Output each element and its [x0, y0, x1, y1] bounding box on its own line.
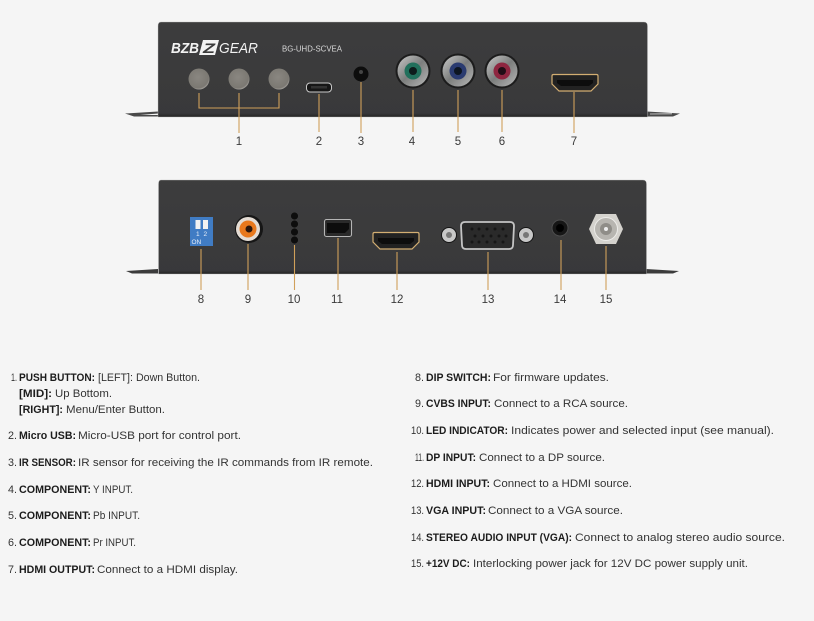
legend: right column: For firmware updates. — [493, 372, 609, 384]
legend: right column: 14. — [411, 532, 424, 544]
legend: right column — [411, 372, 785, 570]
LED indicators — [291, 212, 298, 244]
legend: left column: Connect to a HDMI display. — [97, 564, 238, 576]
legend: left column: Menu/Enter Button. — [66, 404, 165, 416]
DIP switch: ON — [192, 239, 202, 246]
legend: left column: 1. — [11, 372, 17, 384]
rear view numbers: 11 — [331, 294, 343, 306]
device body — [158, 180, 646, 274]
CVBS RCA jack — [235, 215, 263, 243]
legend: right column: 9. — [415, 398, 424, 410]
legend: left column: 5. — [8, 510, 17, 522]
HDMI input port — [373, 232, 419, 249]
rear view numbers: 9 — [245, 294, 251, 306]
legend: right column: +12V DC: — [426, 558, 470, 570]
brand logo: BZB — [171, 40, 199, 57]
legend: left column: [RIGHT]: — [19, 404, 63, 416]
mounting feet — [126, 269, 679, 274]
legend: right column: HDMI INPUT: — [426, 478, 490, 490]
DIP switch: 2 — [204, 231, 208, 238]
DIP switch — [190, 217, 213, 246]
front view numbers: 5 — [455, 136, 461, 148]
front view numbers: 6 — [499, 136, 505, 148]
legend: right column: 15. — [411, 558, 424, 570]
callout leader lines, front — [199, 82, 574, 133]
legend: right column: VGA INPUT: — [426, 505, 486, 517]
DisplayPort input — [324, 220, 352, 236]
front view numbers: 3 — [358, 136, 364, 148]
rear view numbers: 15 — [600, 294, 612, 306]
legend: right column: STEREO AUDIO INPUT (VGA): — [426, 532, 572, 544]
legend: right column: 12. — [411, 478, 424, 490]
legend: left column: Up Bottom. — [55, 388, 112, 400]
IR sensor — [354, 66, 368, 82]
legend: right column: 13. — [411, 505, 424, 517]
rear view numbers: 13 — [482, 294, 494, 306]
DC power jack — [589, 214, 623, 244]
legend: left column: 3. — [8, 457, 17, 469]
component jack: Pb — [440, 54, 476, 88]
legend: right column: LED INDICATOR: — [426, 425, 508, 437]
front view numbers: 2 — [316, 136, 322, 148]
front view numbers: 7 — [571, 136, 577, 148]
device body — [158, 22, 648, 117]
mounting feet — [125, 112, 680, 116]
legend: right column: 10. — [411, 425, 424, 437]
legend: right column: Connect to a HDMI source. — [493, 478, 632, 490]
legend: left column: 2. — [8, 430, 17, 442]
legend: left column: 6. — [8, 537, 17, 549]
legend: left column: 4. — [8, 484, 17, 496]
legend: left column: PUSH BUTTON: — [19, 372, 95, 384]
panel: front view of device — [125, 22, 680, 133]
legend: right column: 8. — [415, 372, 424, 384]
legend: left column: Micro USB: — [19, 430, 76, 442]
legend: left column: COMPONENT: — [19, 537, 91, 549]
legend: right column: Connect to analog stereo audio source. — [575, 532, 785, 544]
legend: left column: COMPONENT: — [19, 484, 91, 496]
legend: right column: 11. — [415, 452, 424, 464]
micro USB port — [306, 83, 332, 92]
legend: right column: Connect to a VGA source. — [488, 505, 623, 517]
legend: right column: Indicates power and selected input (see manual). — [511, 425, 774, 437]
front view numbers: 1 — [236, 136, 242, 148]
legend: left column — [8, 372, 373, 576]
DIP switch: 1 — [196, 231, 200, 238]
rear view numbers: 10 — [288, 294, 300, 306]
legend: right column: Interlocking power jack for 12V DC power supply unit. — [473, 558, 748, 570]
legend: left column: 7. — [8, 564, 17, 576]
front view numbers: 4 — [409, 136, 416, 148]
brand logo — [171, 40, 258, 57]
push buttons — [188, 68, 290, 90]
front view numbers — [236, 136, 577, 148]
component jack: Pr — [484, 54, 520, 88]
legend: left column: [LEFT]: Down Button. — [98, 372, 200, 384]
brand logo: GEAR — [219, 40, 258, 57]
legend: left column: Pr INPUT. — [93, 537, 136, 549]
rear view numbers: 12 — [391, 294, 403, 306]
VGA input port — [442, 222, 534, 249]
legend: right column: Connect to a RCA source. — [494, 398, 628, 410]
legend: left column: HDMI OUTPUT: — [19, 564, 95, 576]
HDMI output port — [552, 74, 598, 91]
legend: left column: COMPONENT: — [19, 510, 91, 522]
brand logo: Z — [202, 40, 216, 56]
rear view numbers: 14 — [554, 294, 567, 306]
legend: left column: IR SENSOR: — [19, 457, 76, 469]
legend: left column: IR sensor for receiving the IR commands from IR remote. — [78, 457, 373, 469]
legend: left column: Micro-USB port for control port. — [78, 430, 241, 442]
component jack: Y — [396, 54, 430, 88]
legend: right column: DP INPUT: — [426, 452, 476, 464]
rear view numbers: 8 — [198, 294, 204, 306]
legend: right column: CVBS INPUT: — [426, 398, 491, 410]
rear view numbers — [198, 294, 612, 306]
legend: left column: [MID]: — [19, 388, 52, 400]
model name: BG-UHD-SCVEA — [282, 44, 342, 54]
legend: right column: Connect to a DP source. — [479, 452, 605, 464]
callout leader lines, rear — [201, 238, 606, 290]
stereo audio jack — [552, 220, 568, 236]
panel: rear view of device — [126, 180, 679, 290]
legend: right column: DIP SWITCH: — [426, 372, 491, 384]
legend: left column: Y INPUT. — [93, 484, 133, 496]
legend: left column: Pb INPUT. — [93, 510, 140, 522]
